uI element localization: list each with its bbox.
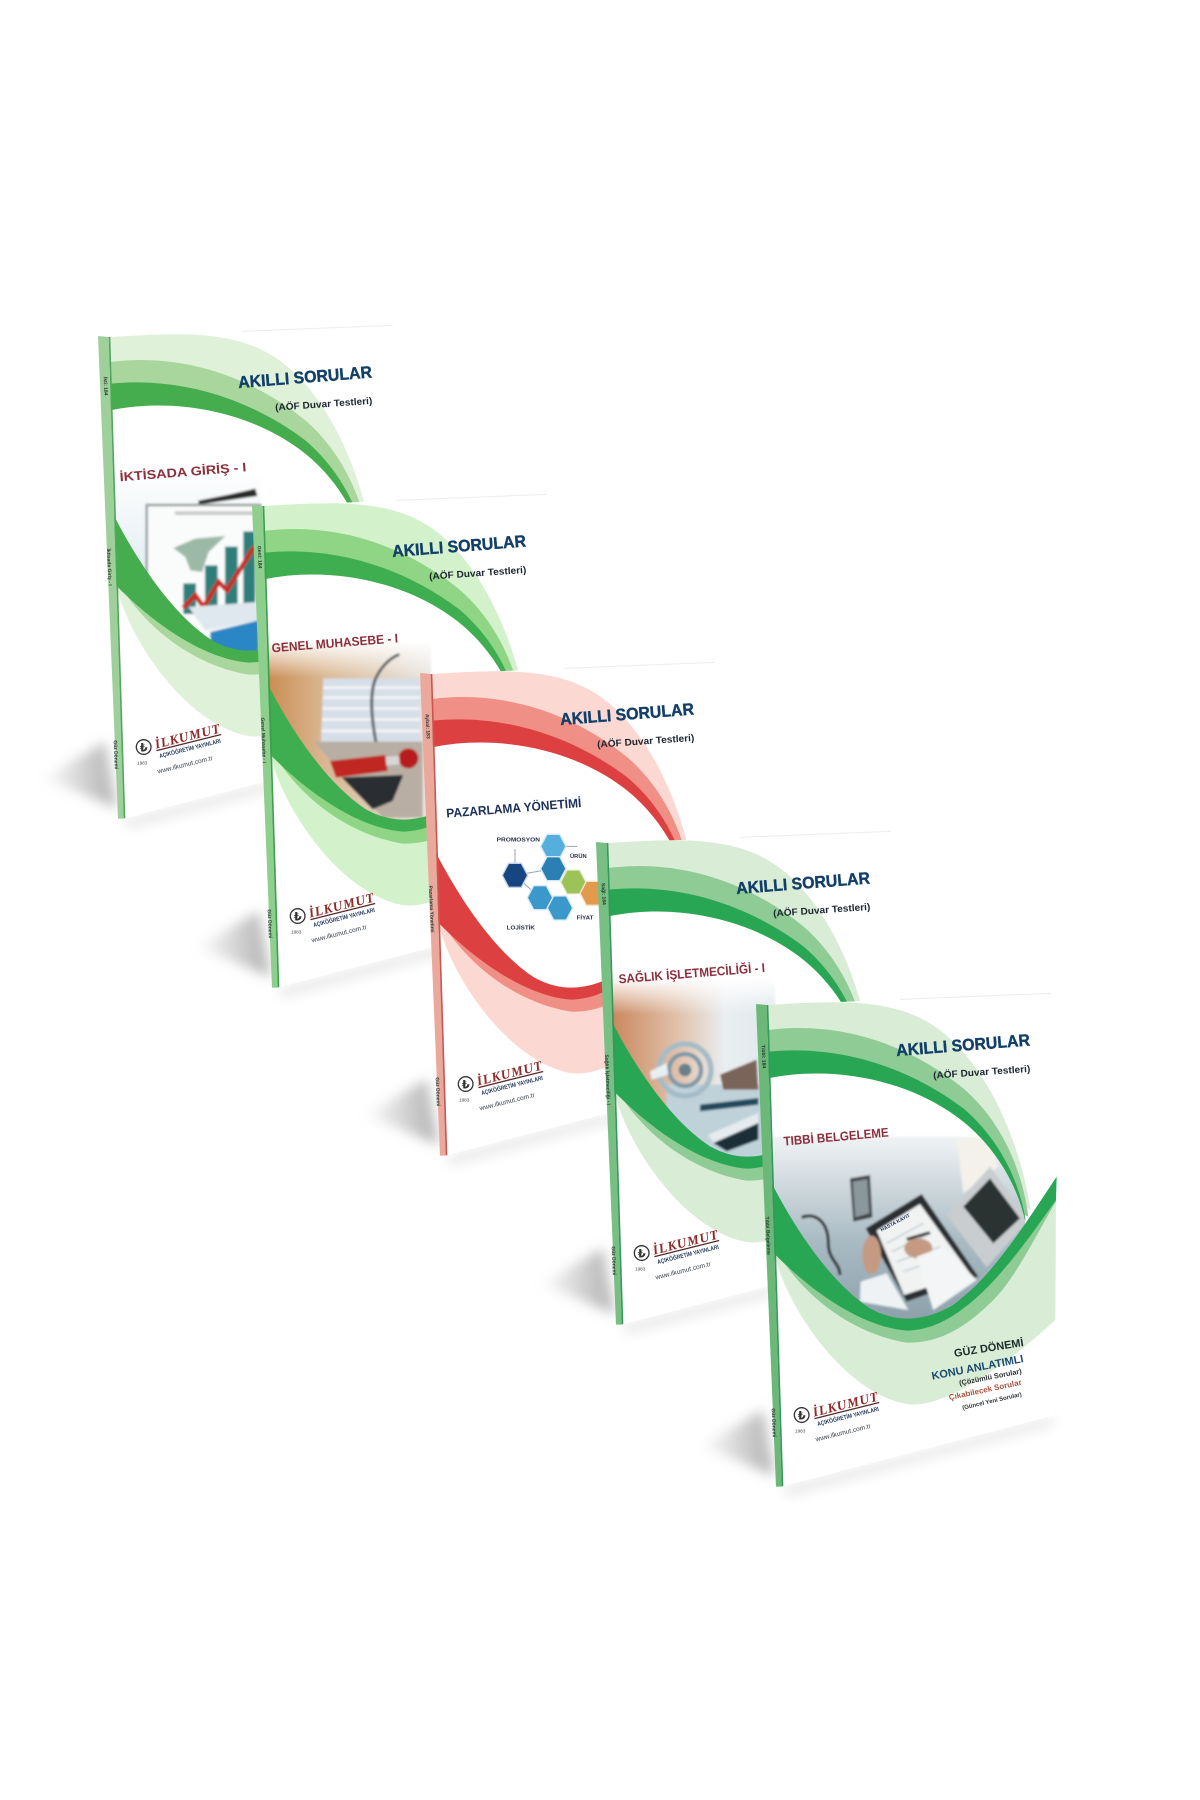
- season text block: GÜZ DÖNEMİ: [953, 1336, 1024, 1360]
- title: book 3: PAZARLAMA YÖNETİMİ: [446, 795, 582, 821]
- logo: book 4: İLKUMUT: [650, 1227, 720, 1258]
- shadow: book 2: [196, 911, 550, 997]
- season text block: Çıkabilecek Sorular: [948, 1378, 1022, 1402]
- logo: book 5: www.ilkumut.com.tr: [814, 1423, 872, 1444]
- spine: book 4: Sağlık İşletmeciliği - I: [603, 1054, 612, 1106]
- cover: book 3: [431, 662, 719, 1156]
- book 2: Genel Muhasebe - I: [196, 494, 553, 997]
- spine: book 1: Güz Dönemi: [112, 740, 119, 770]
- logo: book 4: www.ilkumut.com.tr: [654, 1261, 712, 1282]
- logo: book 1: İLKUMUT: [152, 721, 222, 752]
- logo: book 3: AÇIKÖĞRETİM YAYINLARI: [480, 1074, 544, 1097]
- spine: book 2: Genl: 184: [256, 546, 263, 569]
- heading: book 5: AKILLI SORULAR: [895, 1031, 1031, 1060]
- upper waves: book 2: [264, 503, 527, 848]
- book 1: İktisada Giriş - I: [42, 325, 399, 828]
- subtitle: book 2: (AÖF Duvar Testleri): [429, 565, 527, 583]
- logo: book 3: www.ilkumut.com.tr: [478, 1092, 536, 1113]
- book 3: Pazarlama Yönetimi: [364, 662, 721, 1165]
- lower waves: book 3: [432, 846, 721, 1074]
- season text block: (Güncel Yeni Sorular): [962, 1392, 1022, 1412]
- photo: papers, pen and calculator: [267, 643, 432, 820]
- logo: book 1: www.ilkumut.com.tr: [156, 755, 214, 776]
- hexagon diagram: [497, 834, 605, 932]
- photo: chart on screen: [116, 487, 262, 651]
- logo: book 2: İLKUMUT: [306, 890, 376, 921]
- logo: book 2: [290, 890, 382, 945]
- logo: book 1: [136, 721, 228, 776]
- logo: book 4: AÇIKÖĞRETİM YAYINLARI: [656, 1243, 720, 1266]
- book 5: Tıbbi Belgeleme: [700, 993, 1057, 1496]
- spine: book 1: [98, 336, 125, 819]
- logo: book 1: ₺: [140, 742, 148, 754]
- logo: book 5: ₺: [798, 1410, 806, 1422]
- title: book 2: GENEL MUHASEBE - I: [271, 631, 399, 655]
- spine: book 2: [252, 505, 279, 988]
- season text block: [931, 1336, 1025, 1412]
- spine: book 4: [596, 842, 623, 1325]
- hexagon diagram: PROMOSYON: [497, 838, 540, 844]
- logo: book 2: AÇIKÖĞRETİM YAYINLARI: [312, 906, 376, 929]
- heading: book 1: AKILLI SORULAR: [237, 363, 373, 392]
- heading: book 4: AKILLI SORULAR: [735, 869, 871, 898]
- spine: book 5: Güz Dönemi: [770, 1408, 777, 1438]
- spine: book 3: Güz Dönemi: [434, 1077, 441, 1107]
- logo: book 4: [634, 1227, 726, 1282]
- spine: book 2: Genel Muhasebe - I: [259, 717, 267, 764]
- logo: book 4: 1983: [635, 1267, 646, 1272]
- logo: book 1: AÇIKÖĞRETİM YAYINLARI: [158, 737, 222, 760]
- upper waves: book 4: [608, 840, 871, 1185]
- cover: book 4: [607, 831, 895, 1325]
- hexagon diagram: ÜRÜN: [570, 853, 587, 860]
- cover: book 2: [263, 494, 551, 988]
- subtitle: book 1: (AÖF Duvar Testleri): [275, 396, 373, 414]
- upper waves: book 5: [768, 1002, 1031, 1347]
- title: book 5: TIBBİ BELGELEME: [783, 1125, 889, 1149]
- logo: book 3: [458, 1058, 550, 1113]
- lower waves: book 5: [768, 1177, 1057, 1405]
- heading: book 3: AKILLI SORULAR: [559, 700, 695, 729]
- photo: medical desk: HASTA KAYIT: [880, 1213, 911, 1233]
- logo: book 5: [794, 1389, 886, 1444]
- logo: book 2: 1983: [291, 930, 302, 935]
- logo: book 3: İLKUMUT: [474, 1058, 544, 1089]
- title: book 4: SAĞLIK İŞLETMECİLİĞİ - I: [618, 960, 765, 986]
- shadow: book 4: [540, 1248, 894, 1334]
- logo: book 3: ₺: [462, 1079, 470, 1091]
- spine: book 5: Tıbbi Belgeleme: [764, 1216, 771, 1255]
- logo: book 5: İLKUMUT: [810, 1389, 880, 1420]
- spine: book 2: Güz Dönemi: [266, 909, 273, 939]
- spine: book 5: Tıbbi: 184: [760, 1045, 767, 1069]
- spine: book 5: [756, 1004, 783, 1487]
- logo: book 2: www.ilkumut.com.tr: [310, 924, 368, 945]
- season text block: (Çözümlü Sorular): [958, 1366, 1023, 1387]
- spine: book 3: Aybal: 183: [424, 714, 431, 739]
- spine: book 4: Güz Dönemi: [610, 1246, 617, 1276]
- spine: book 4: Sağl: 184: [600, 883, 607, 905]
- lower waves: book 2: [264, 678, 553, 906]
- shadow: book 1: [42, 742, 396, 828]
- cover: book 1: [109, 325, 397, 819]
- shadow: book 5: [700, 1410, 1054, 1496]
- photo: technology target and laptop: [611, 980, 776, 1157]
- lower waves: book 4: [608, 1015, 897, 1243]
- title: book 1: İKTİSADA GİRİŞ - I: [119, 459, 247, 484]
- cover: book 5: [767, 993, 1055, 1487]
- hexagon diagram: FİYAT: [577, 915, 594, 922]
- logo: book 5: AÇIKÖĞRETİM YAYINLARI: [816, 1405, 880, 1428]
- subtitle: book 3: (AÖF Duvar Testleri): [597, 733, 695, 751]
- spine: book 3: Pazarlama Yönetimi: [427, 885, 435, 933]
- upper waves: book 1: [110, 334, 373, 679]
- logo: book 2: ₺: [294, 911, 302, 923]
- upper waves: book 3: [432, 671, 695, 1016]
- subtitle: book 5: (AÖF Duvar Testleri): [933, 1064, 1031, 1082]
- lower waves: book 1: [110, 509, 399, 737]
- logo: book 4: ₺: [638, 1248, 646, 1260]
- logo: book 3: 1983: [459, 1098, 470, 1103]
- shadow: book 3: [364, 1079, 718, 1165]
- logo: book 5: 1983: [795, 1429, 806, 1434]
- photo: medical desk: [772, 1136, 1025, 1319]
- hexagon diagram: LOJİSTİK: [507, 925, 536, 932]
- spine: book 1: İkti: 184: [102, 377, 109, 396]
- book 4: Sağlık İşletmeciliği - I: [540, 831, 897, 1334]
- heading: book 2: AKILLI SORULAR: [391, 532, 527, 561]
- spine: book 1: İktisada Giriş - I: [105, 548, 114, 586]
- spine: book 3: [420, 673, 447, 1156]
- logo: book 1: 1983: [137, 761, 148, 766]
- season text block: KONU ANLATIMLI: [931, 1353, 1025, 1383]
- subtitle: book 4: (AÖF Duvar Testleri): [773, 902, 871, 920]
